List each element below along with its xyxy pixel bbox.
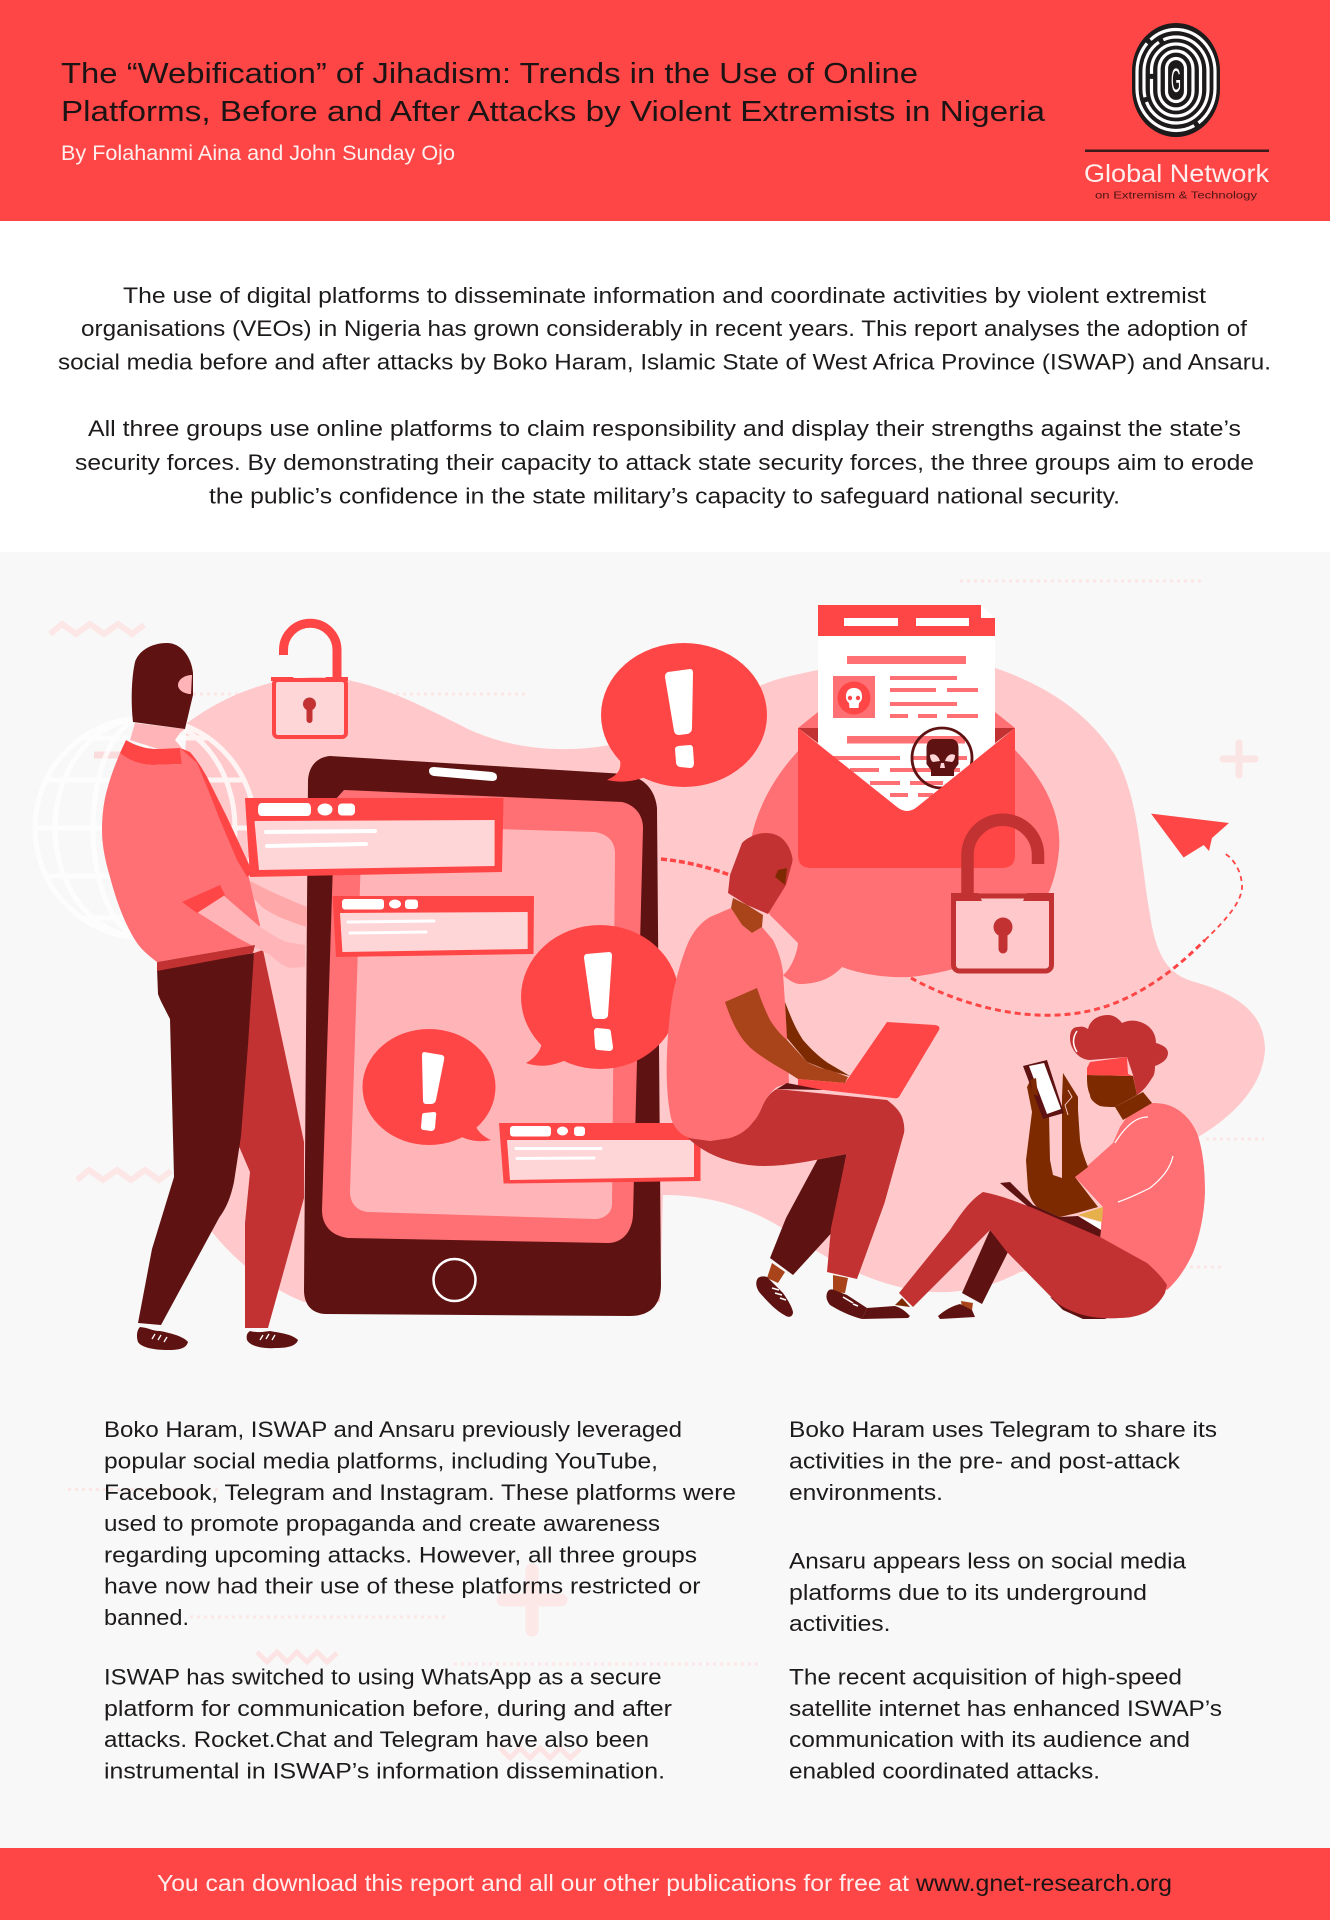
face [1087, 1075, 1137, 1107]
paragraph: Boko Haram Telegram: environments. [789, 1480, 943, 1505]
neck [130, 723, 185, 749]
title: The “Webification” of Jihadism: Trends in the Use of Online [61, 58, 918, 90]
paragraph: previous platforms: have now had their use of these platforms restricted or [104, 1574, 701, 1598]
footer link: www.gnet-research.org [915, 1870, 1172, 1896]
icon: open padlock small [271, 623, 348, 737]
paragraph: Ansaru: activities. [789, 1611, 890, 1636]
paragraph: previous platforms: regarding upcoming attacks. However, all three groups [104, 1542, 697, 1568]
intro text paragraph 1 [58, 283, 1271, 374]
shoes [137, 1327, 298, 1350]
title: Platforms, Before and After Attacks by Violent Extremists in Nigeria [61, 96, 1046, 128]
thigh [899, 1192, 1167, 1318]
dotted connection line [661, 859, 730, 875]
logo: Global Network [1084, 23, 1270, 202]
neck [731, 898, 763, 933]
paragraph: Boko Haram Telegram: activities in the pre- and post-attack [789, 1448, 1181, 1474]
white intro background [0, 221, 1330, 552]
byline: By Folahanmi Aina and John Sunday Ojo [61, 142, 455, 165]
paragraph: ISWAP WhatsApp: ISWAP has switched to using WhatsApp as a secure [104, 1664, 662, 1690]
intro text paragraph 1: organisations (VEOs) in Nigeria has grown considerably in recent years. This report analyses the adoption of [81, 316, 1248, 341]
paper [818, 605, 995, 830]
front leg [138, 953, 254, 1325]
neck [1115, 1092, 1152, 1120]
front arm [725, 988, 848, 1083]
back arm [785, 1002, 850, 1076]
finger lines [1065, 1090, 1072, 1115]
background blob [170, 658, 1265, 1302]
intro text paragraph 2 [75, 416, 1254, 508]
notification 1 [245, 798, 504, 877]
footer band [0, 1848, 1330, 1920]
person left [102, 643, 307, 1350]
speech bubble center [521, 925, 679, 1069]
waist band [157, 945, 255, 971]
phone [304, 756, 661, 1316]
arms [1026, 1073, 1098, 1217]
paragraph: Ansaru: platforms due to its underground [789, 1580, 1147, 1605]
paragraph: satellite internet: The recent acquisition of high-speed [789, 1664, 1182, 1690]
intro text paragraph 1: The use of digital platforms to disseminate information and coordinate activities by violent extremist [123, 283, 1207, 308]
speech bubble top [601, 643, 767, 787]
person with laptop [667, 833, 940, 1319]
ankles [961, 1301, 973, 1310]
blindfold [1087, 1057, 1133, 1076]
icon: skull stamp [912, 728, 972, 788]
envelope [798, 712, 1015, 868]
phone in hand [1023, 1060, 1064, 1119]
cuff [182, 885, 225, 913]
intro text paragraph 2: All three groups use online platforms to claim responsibility and display their strengths against the state’s [88, 416, 1241, 441]
header band [0, 0, 1330, 221]
paragraph: previous platforms: Boko Haram, ISWAP and Ansaru previously leveraged [104, 1417, 682, 1442]
torso [667, 908, 789, 1141]
ankles [767, 1263, 848, 1293]
back thigh [1000, 1182, 1107, 1319]
footer text: You can download this report and all our other publications for free at [157, 1870, 910, 1896]
hood [728, 833, 792, 914]
title [61, 58, 1046, 128]
torso [1075, 1103, 1205, 1290]
thigh [688, 1089, 904, 1279]
paragraph: ISWAP WhatsApp: platform for communication before, during and after [104, 1696, 673, 1721]
dark leg [770, 1154, 846, 1275]
intro text paragraph 2: security forces. By demonstrating their capacity to attack state security forces, the three groups aim to erode [75, 450, 1254, 475]
torso [102, 748, 260, 962]
icon: fingerprint: G [1171, 62, 1181, 100]
icon: open padlock large [951, 820, 1054, 971]
paragraph: Boko Haram Telegram: Boko Haram uses Telegram to share its [789, 1417, 1217, 1442]
notification 2 [333, 896, 534, 957]
illustration [35, 605, 1265, 1350]
paragraph: previous platforms: used to promote propaganda and create awareness [104, 1511, 660, 1536]
icon: paper plane [1151, 814, 1229, 858]
speech bubble lower left [362, 1029, 496, 1145]
balaclava [132, 643, 193, 729]
paragraph: Boko Haram Telegram [789, 1417, 1217, 1505]
right column text [789, 1417, 1222, 1784]
intro text paragraph 1: social media before and after attacks by Boko Haram, Islamic State of West Africa Province (ISWAP) and Ansaru. [58, 350, 1271, 374]
paragraph: satellite internet [789, 1664, 1222, 1784]
shirt highlights [1115, 1117, 1173, 1202]
hair [1070, 1015, 1168, 1095]
collar [120, 740, 182, 765]
icon: fingerprint [1132, 23, 1220, 137]
paragraph: satellite internet: communication with its audience and [789, 1727, 1190, 1752]
paragraph: satellite internet: enabled coordinated attacks. [789, 1758, 1100, 1784]
laptop [798, 1022, 940, 1098]
front forearm [197, 895, 305, 968]
paragraph: previous platforms [104, 1417, 736, 1630]
paragraph: satellite internet: satellite internet has enhanced ISWAP’s [789, 1696, 1222, 1721]
background decoration [50, 581, 1264, 1758]
paragraph: ISWAP WhatsApp: attacks. Rocket.Chat and Telegram have also been [104, 1727, 649, 1752]
dark back leg [962, 1230, 1008, 1304]
intro text paragraph 2: the public’s confidence in the state military’s capacity to safeguard national security. [209, 484, 1120, 508]
paragraph: ISWAP WhatsApp [104, 1664, 673, 1784]
paragraph: previous platforms: banned. [104, 1605, 189, 1630]
illustration panel background [0, 552, 1330, 1848]
logo: Global Network: on Extremism & Technology [1095, 190, 1258, 202]
notification 3 [499, 1123, 700, 1184]
back leg [238, 950, 304, 1328]
paragraph: previous platforms: Facebook, Telegram and Instagram. These platforms were [104, 1480, 736, 1505]
icon: globe [35, 718, 255, 938]
paragraph: Ansaru [789, 1548, 1187, 1636]
logo: Global Network: Global Network [1084, 160, 1270, 188]
paragraph: previous platforms: popular social media platforms, including YouTube, [104, 1448, 658, 1474]
person with phone [862, 1015, 1205, 1319]
rear forearm [243, 877, 307, 927]
icon: skull small [846, 688, 862, 708]
dotted flight path [911, 853, 1242, 1015]
sleeve edge [180, 748, 253, 877]
shoes [862, 1304, 975, 1319]
left column text [104, 1417, 736, 1784]
darker blob behind envelope [750, 749, 1059, 984]
shirt gap and gold detail [1078, 1216, 1101, 1230]
shoes [756, 1276, 867, 1319]
paragraph: ISWAP WhatsApp: instrumental in ISWAP’s information dissemination. [104, 1758, 665, 1784]
paragraph: Ansaru: Ansaru appears less on social media [789, 1548, 1187, 1574]
